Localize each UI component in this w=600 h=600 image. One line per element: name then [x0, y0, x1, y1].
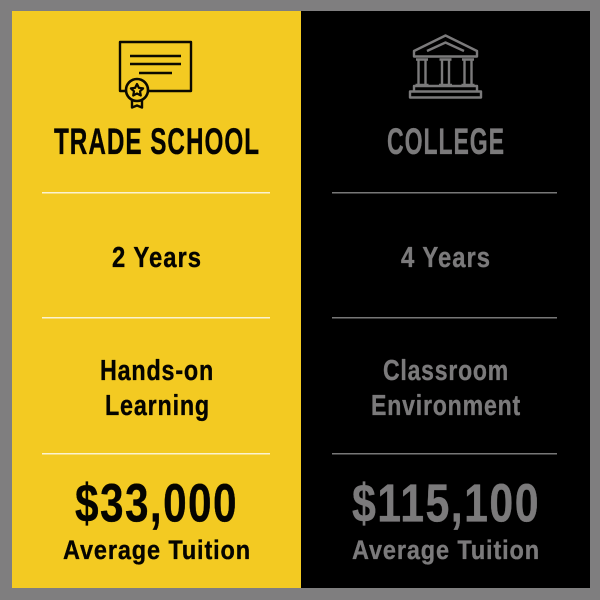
- text: trade average tuition: Average Tuition: [63, 535, 251, 565]
- text: hands-on learning: Hands-on: [100, 355, 214, 387]
- text: classroom environment: Classroom: [383, 355, 509, 387]
- text: classroom environment: [371, 355, 521, 422]
- icon: certificate: [120, 42, 191, 108]
- heading: college: COLLEGE: [387, 120, 505, 162]
- text: hands-on learning: Learning: [105, 390, 210, 422]
- text: college average tuition: Average Tuition: [352, 535, 540, 565]
- text: trade tuition amount: $33,000: [75, 474, 238, 534]
- icon: bank building: [410, 36, 481, 98]
- text: 2 years: 2 Years: [112, 242, 202, 274]
- panel: trade school: [12, 11, 301, 588]
- text: classroom environment: Environment: [371, 390, 521, 422]
- text: college tuition amount: $115,100: [352, 474, 540, 534]
- heading: trade school: TRADE SCHOOL: [54, 120, 260, 162]
- text: 4 years: 4 Years: [401, 242, 491, 274]
- panel: college: [301, 11, 590, 588]
- text: hands-on learning: [100, 355, 214, 422]
